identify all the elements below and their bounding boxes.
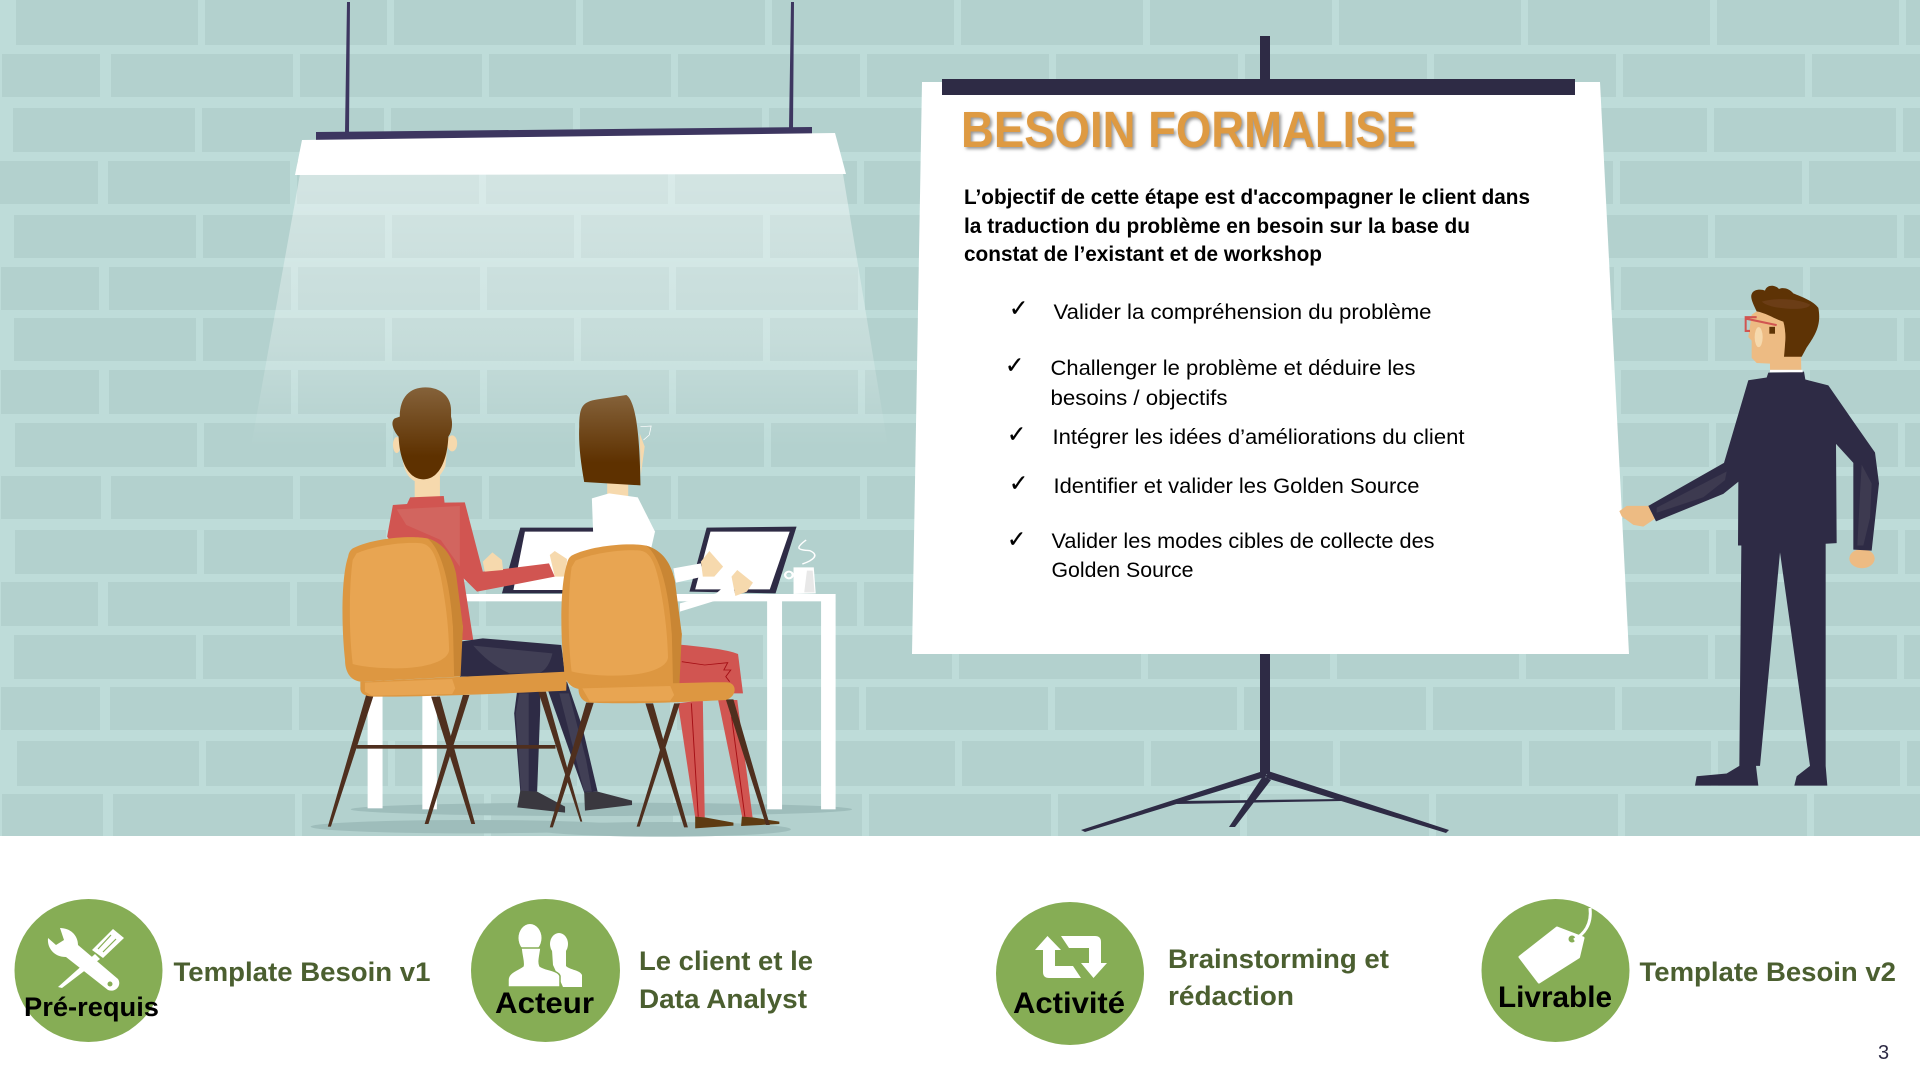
checklist: besoins / objectifs bbox=[1050, 387, 1228, 410]
lamp hangers bbox=[345, 2, 794, 133]
green disc bbox=[1482, 899, 1630, 1042]
illustration: two people seated at a desk bbox=[311, 387, 852, 837]
ceiling lamp bbox=[251, 2, 888, 447]
text: brainstorming: rédaction bbox=[1168, 981, 1294, 1011]
label: Pré-requis bbox=[24, 992, 159, 1022]
bottom card: activité bbox=[996, 902, 1144, 1045]
screen pole and tripod bbox=[1081, 36, 1449, 833]
projection screen bbox=[912, 36, 1629, 833]
desk bbox=[368, 594, 836, 809]
text: template v1: Template Besoin v1 bbox=[174, 957, 430, 987]
left chair bbox=[328, 537, 582, 827]
bottom card: livrable bbox=[1482, 899, 1630, 1042]
label: Livrable bbox=[1498, 981, 1612, 1014]
bottom card: pré-requis bbox=[14, 899, 162, 1042]
light cone bbox=[251, 174, 888, 447]
right chair bbox=[550, 544, 770, 827]
text: client and analyst: Le client et le bbox=[639, 946, 813, 976]
sleeve highlights bbox=[1657, 465, 1872, 546]
seated woman bbox=[579, 395, 779, 828]
intro paragraph: L’objectif de cette étape est d'accompagner le client dans bbox=[964, 186, 1530, 209]
icon: wrench and screwdriver bbox=[48, 928, 124, 991]
floor shadows bbox=[311, 803, 852, 837]
checklist: Valider la compréhension du problème bbox=[1054, 301, 1432, 324]
checklist: ✓ bbox=[1007, 527, 1026, 553]
right laptop bbox=[689, 527, 797, 593]
checklist: Valider les modes cibles de collecte des bbox=[1052, 530, 1434, 553]
lamp bar bbox=[316, 127, 812, 141]
checklist: ✓ bbox=[1009, 471, 1028, 497]
screen top bar bbox=[942, 79, 1575, 95]
presenter suit bbox=[1648, 372, 1879, 786]
label: Activité bbox=[1013, 987, 1125, 1020]
label: Acteur bbox=[495, 987, 594, 1020]
checklist: Intégrer les idées d’améliorations du client bbox=[1052, 426, 1465, 449]
intro paragraph: constat de l’existant et de workshop bbox=[964, 243, 1322, 266]
page number: 3 bbox=[1878, 1042, 1889, 1064]
icon: tag bbox=[1520, 908, 1590, 982]
bottom card: acteur bbox=[471, 899, 620, 1042]
green disc bbox=[471, 899, 620, 1042]
checklist: ✓ bbox=[1007, 422, 1026, 448]
text: brainstorming bbox=[1168, 944, 1389, 1011]
checklist: ✓ bbox=[1009, 296, 1028, 322]
green disc bbox=[996, 902, 1144, 1045]
icon: cycle arrows bbox=[1035, 936, 1107, 978]
checklist: ✓ bbox=[1005, 353, 1024, 379]
illustration: standing presenter bbox=[1619, 286, 1879, 786]
icon: two people bbox=[508, 924, 582, 987]
green disc bbox=[14, 899, 162, 1042]
text: template v2: Template Besoin v2 bbox=[1640, 957, 1896, 987]
text: client and analyst bbox=[639, 946, 813, 1014]
text: client and analyst: Data Analyst bbox=[639, 984, 807, 1014]
coffee cup bbox=[785, 540, 816, 594]
seated man bbox=[387, 387, 632, 813]
checklist: Challenger le problème et déduire les bbox=[1050, 357, 1416, 380]
checklist: Golden Source bbox=[1052, 559, 1194, 582]
screen surface bbox=[912, 82, 1629, 654]
checklist: Identifier et valider les Golden Source bbox=[1054, 475, 1420, 498]
screen title: BESOIN FORMALISE bbox=[961, 101, 1416, 158]
lamp shade bbox=[295, 133, 846, 175]
left laptop bbox=[502, 528, 601, 593]
intro paragraph: la traduction du problème en besoin sur la base du bbox=[964, 215, 1470, 238]
presenter head bbox=[1746, 286, 1819, 372]
intro paragraph bbox=[964, 186, 1530, 266]
presenter hands bbox=[1619, 506, 1875, 568]
brick wall background bbox=[0, 0, 1920, 836]
checklist bbox=[1005, 296, 1465, 582]
text: brainstorming: Brainstorming et bbox=[1168, 944, 1389, 974]
